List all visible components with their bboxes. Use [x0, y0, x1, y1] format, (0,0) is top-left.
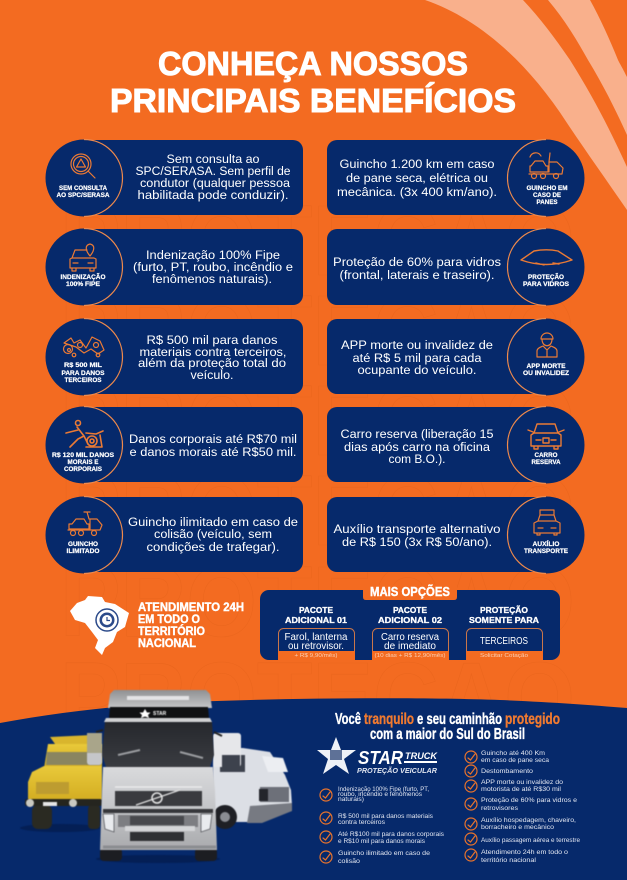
label: guincho em caso de panes	[526, 185, 568, 206]
option: proteção somente para terceiros: SOMENTE PARA	[469, 615, 539, 625]
heading: você tranquilo: protegido	[505, 711, 560, 728]
option: pacote adicional 01: + R$ 9,90/mês)	[294, 653, 338, 659]
item: guincho ilimitado: colisão	[338, 859, 361, 865]
item: guincho 400 km: em caso de pane seca	[481, 758, 550, 764]
option: pacote adicional 01: ADICIONAL 01	[285, 615, 347, 625]
text: atendimento 24h: EM TODO O	[138, 614, 200, 626]
option: pacote adicional 01	[278, 605, 355, 660]
text: danos materiais: veículo.	[190, 368, 234, 382]
item: R$100 mil: Até R$100 mil para danos corporais	[338, 832, 444, 838]
panel: proteção vidros	[327, 228, 584, 306]
text: carro reserva: dias após carro na oficina	[344, 440, 490, 454]
label: sem consulta	[56, 185, 110, 199]
option: pacote adicional 02: ADICIONAL 02	[378, 615, 442, 625]
logo: star truck: STAR	[358, 748, 403, 768]
item: indenização: Indenização 100% Fipe (furto, PT,	[338, 787, 429, 793]
item: proteção vidros	[465, 798, 578, 812]
label: guincho ilimitado: ILIMITADO	[66, 548, 100, 555]
text: app morte	[341, 338, 493, 377]
text: auxílio transporte: Auxílio transporte alternativo	[334, 522, 501, 536]
list: left benefits	[320, 787, 444, 865]
option: proteção somente para terceiros: TERCEIROS	[480, 636, 528, 647]
icon: windshield	[521, 250, 572, 265]
logo: star truck	[317, 737, 439, 775]
option: pacote adicional 02	[372, 605, 449, 660]
label: sem consulta: SEM CONSULTA	[59, 185, 108, 192]
item: atendimento 24h: território nacional	[481, 858, 536, 864]
item: APP morte: motorista de até R$30 mil	[481, 787, 561, 793]
option: proteção somente para terceiros	[466, 605, 543, 660]
panel: sem consulta	[46, 140, 303, 217]
text: indenização: Indenização 100% Fipe	[146, 248, 280, 262]
panel: guincho panes	[327, 140, 584, 217]
text: carro reserva: Carro reserva (liberação 15	[340, 427, 494, 441]
icon: tow truck with gauge	[529, 153, 563, 178]
truck visor logo	[140, 709, 167, 718]
title: PRINCIPAIS BENEFÍCIOS	[110, 82, 516, 120]
label: indenização: INDENIZAÇÃO	[60, 274, 106, 281]
item: R$100 mil	[320, 831, 444, 845]
text: guincho ilimitado	[128, 515, 298, 554]
truck visor logo: STAR	[153, 711, 167, 717]
heading: você tranquilo: e seu caminhão	[417, 711, 502, 728]
text: guincho panes: Guincho 1.200 km em caso	[340, 157, 495, 171]
icon: tow truck	[68, 512, 102, 536]
list: right benefits	[465, 751, 581, 864]
text: danos materiais: além da proteção total do	[138, 356, 286, 370]
item: APP morte: APP morte ou invalidez do	[481, 780, 564, 786]
watermark: proteção pattern: PROTEÇÃO	[60, 365, 575, 477]
item: R$100 mil: e R$10 mil para danos morais	[338, 839, 425, 845]
icon: taxi	[534, 510, 560, 535]
text: sem consulta: Sem consulta ao	[166, 152, 260, 166]
item: guincho ilimitado	[320, 851, 431, 865]
panel: danos corporais	[46, 406, 303, 484]
text: atendimento 24h: TERRITÓRIO	[138, 625, 205, 638]
watermark: proteção pattern	[60, 185, 575, 754]
text: auxílio transporte: de R$ 150 (3x R$ 50/ano).	[342, 535, 492, 549]
text: sem consulta: SPC/SERASA. Sem perfil de	[136, 164, 291, 178]
label: indenização: 100% FIPE	[66, 281, 100, 288]
watermark: proteção pattern: PROTEÇÃO	[60, 185, 575, 297]
watermark: proteção pattern: PROTEÇÃO	[60, 455, 575, 567]
label: auxílio transporte: TRANSPORTE	[524, 548, 568, 555]
option: pacote adicional 02: PACOTE	[393, 605, 427, 615]
text: proteção vidros: (frontal, laterais e traseiro).	[340, 268, 494, 282]
text: danos corporais: e danos morais até R$50 mil.	[130, 445, 296, 459]
watermark: proteção pattern: PROTEÇÃO	[60, 275, 575, 387]
label: R$ 120 mil: CORPORAIS	[64, 466, 102, 473]
label: app morte	[523, 363, 569, 377]
label: sem consulta: AO SPC/SERASA	[56, 192, 110, 199]
text: indenização	[133, 248, 293, 286]
navy footer band	[0, 698, 627, 880]
illustration: white truck	[213, 733, 292, 829]
label: proteção para vidros: PARA VIDROS	[523, 281, 569, 288]
label: R$ 500 mil: R$ 500 MIL	[64, 362, 102, 369]
label: guincho em caso de panes: GUINCHO EM	[526, 185, 568, 192]
item: guincho 400 km	[465, 751, 550, 764]
label: R$ 120 mil	[52, 452, 114, 473]
item: guincho ilimitado: Guincho ilimitado em caso de	[338, 851, 431, 857]
text: proteção vidros: Proteção de 60% para vidros	[333, 255, 501, 269]
label: auxílio transporte: AUXÍLIO	[532, 540, 560, 548]
label: guincho ilimitado: GUINCHO	[68, 541, 98, 548]
item: auxílio passagem: Auxílio passagem aérea e terrestre	[481, 838, 581, 844]
panel: danos materiais	[46, 318, 303, 396]
heading: você tranquilo: tranquilo	[364, 711, 414, 728]
text: app morte: até R$ 5 mil para cada	[352, 351, 482, 365]
option: pacote adicional 01: PACOTE	[299, 605, 333, 615]
text: sem consulta: habilitada pode conduzir).	[138, 188, 288, 202]
text: guincho panes: mecânica. (3x 400 km/ano).	[337, 185, 497, 199]
label: guincho em caso de panes: PANES	[536, 199, 558, 206]
logo: star truck: TRUCK	[405, 751, 439, 761]
label: carro reserva	[532, 452, 561, 466]
option: pacote adicional 02: de imediato	[384, 641, 437, 652]
text: atendimento 24h	[138, 602, 244, 650]
panel: guincho ilimitado	[46, 496, 303, 574]
icon: brazil map with clock	[70, 596, 129, 655]
text: sem consulta	[136, 152, 291, 202]
decorative swooshes top right	[425, 0, 627, 210]
text: guincho ilimitado: condições de trafegar).	[146, 540, 280, 554]
title	[110, 46, 516, 120]
item: indenização: naturais)	[338, 797, 364, 803]
panel: carro reserva	[327, 406, 584, 484]
option: pacote adicional 01: ou retrovisor.	[288, 641, 344, 652]
label: R$ 120 mil: MORAIS E	[68, 459, 98, 466]
panel: mais opções	[260, 584, 560, 660]
item: atendimento 24h: Atendimento 24h em todo o	[481, 850, 569, 856]
icon: car with location pin	[70, 244, 96, 271]
illustration: central silver truck	[87, 690, 222, 863]
label: proteção para vidros	[523, 274, 569, 288]
text: indenização: (furto, PT, roubo, incêndio e	[133, 260, 293, 274]
text: guincho panes	[337, 157, 497, 199]
text: danos corporais	[129, 432, 297, 459]
text: proteção vidros	[333, 255, 501, 282]
panel: indenização	[46, 228, 303, 306]
text: indenização: fenômenos naturais).	[152, 272, 272, 286]
icon: person hit by vehicle	[66, 420, 103, 447]
icon: person with helmet	[537, 333, 557, 357]
text: sem consulta: condutor (qualquer pessoa	[140, 176, 290, 190]
panel: auxílio transporte	[327, 496, 584, 574]
label: app morte: APP MORTE	[526, 363, 566, 370]
icon: car front	[528, 424, 564, 449]
icon: damaged property	[64, 337, 104, 357]
text: app morte: ocupante do veículo.	[358, 363, 476, 377]
label: R$ 120 mil: R$ 120 MIL DANOS	[52, 452, 114, 459]
illustration: yellow truck	[20, 735, 102, 832]
text: guincho panes: de pane seca, elétrica ou	[346, 171, 488, 185]
text: guincho ilimitado: Guincho ilimitado em caso de	[128, 515, 298, 529]
text: carro reserva: com B.O.).	[388, 452, 446, 466]
text: atendimento 24h: ATENDIMENTO 24H	[138, 602, 244, 614]
label: carro reserva: RESERVA	[532, 459, 561, 466]
label: carro reserva: CARRO	[534, 452, 558, 459]
label: app morte: OU INVALIDEZ	[523, 370, 569, 377]
text: guincho ilimitado: colisão (veículo, sem	[154, 527, 272, 541]
option: proteção somente para terceiros: Solicitar Cotação	[480, 653, 528, 659]
item: R$ 500 mil	[320, 812, 433, 826]
option: pacote adicional 02: Carro reserva	[381, 632, 440, 643]
text: danos materiais	[138, 333, 286, 382]
watermark: proteção pattern: PROTEÇÃO	[60, 642, 575, 754]
item: auxílio hospedagem: Auxílio hospedagem, chaveiro,	[481, 818, 576, 824]
item: indenização: roubo, incêndio e fenômenos	[338, 792, 422, 798]
label: indenização	[60, 274, 106, 288]
option: pacote adicional 02: (10 dias + R$ 12,90/mês)	[374, 653, 446, 659]
tab: mais opções: MAIS OPÇÕES	[370, 584, 450, 599]
item: destombamento: Destombamento	[481, 769, 534, 775]
label: R$ 500 mil: TERCEIROS	[64, 377, 102, 384]
option: pacote adicional 01: Farol, lanterna	[284, 632, 348, 643]
item: R$ 500 mil: contra terceiros	[338, 820, 385, 826]
text: atendimento 24h: NACIONAL	[138, 638, 196, 650]
text: auxílio transporte	[334, 522, 501, 549]
icon: magnifier with warning	[71, 154, 95, 178]
label: R$ 500 mil	[62, 362, 104, 384]
panel: APP morte	[327, 318, 584, 396]
text: carro reserva	[340, 427, 494, 466]
label: auxílio transporte	[524, 540, 568, 555]
item: atendimento 24h	[465, 849, 569, 864]
heading: você tranquilo: com a maior do Sul do Brasil	[370, 726, 525, 743]
label: R$ 500 mil: PARA DANOS	[62, 370, 104, 377]
title: CONHEÇA NOSSOS	[158, 46, 468, 83]
option: proteção somente para terceiros: PROTEÇÃO	[480, 605, 528, 615]
label: guincho em caso de panes: CASO DE	[533, 192, 561, 199]
label: proteção para vidros: PROTEÇÃO	[528, 274, 564, 281]
item: R$ 500 mil: R$ 500 mil para danos materiais	[338, 814, 433, 820]
item: indenização	[320, 787, 429, 803]
label: guincho ilimitado	[66, 541, 100, 555]
item: APP morte	[465, 780, 564, 793]
logo: star truck: PROTEÇÃO VEICULAR	[357, 766, 438, 775]
watermark: proteção pattern: PROTEÇÃO	[60, 546, 575, 658]
heading: você tranquilo	[335, 711, 560, 743]
item: proteção vidros: Proteção de 60% para vidros e	[481, 798, 578, 804]
text: app morte: APP morte ou invalidez de	[341, 338, 493, 352]
text: danos materiais: materiais contra terceiros,	[140, 345, 286, 359]
item: proteção vidros: retrovisores	[481, 806, 518, 812]
item: auxílio hospedagem: borracheiro e mecânico	[481, 825, 555, 831]
item: auxílio hospedagem	[465, 818, 576, 831]
heading: você tranquilo: Você	[335, 711, 361, 728]
text: danos materiais: R$ 500 mil para danos	[146, 333, 278, 347]
item: guincho 400 km: Guincho até 400 Km	[481, 751, 545, 757]
text: danos corporais: Danos corporais até R$70 mil	[129, 432, 297, 446]
